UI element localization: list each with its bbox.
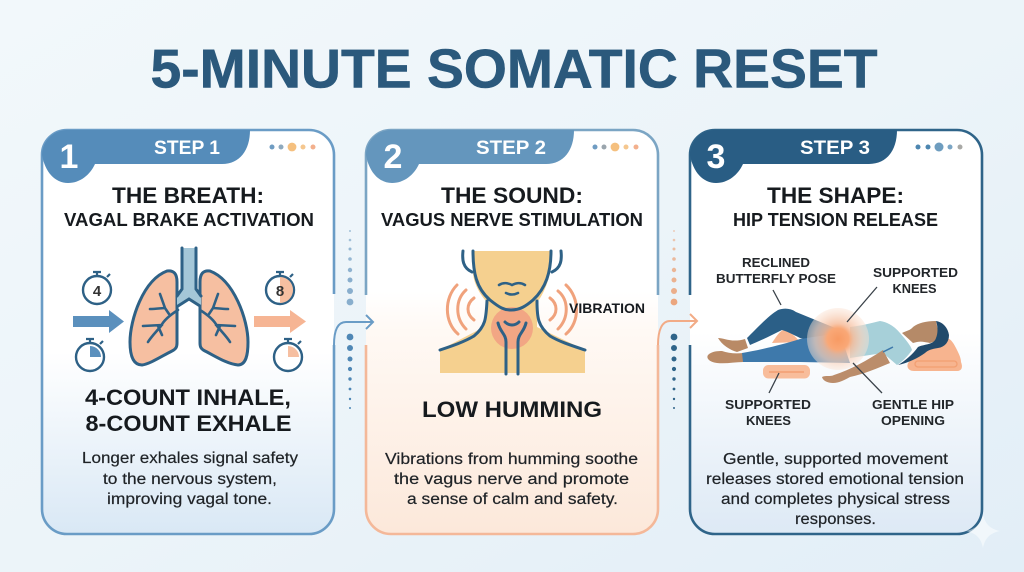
label: reclined butterfly pose: BUTTERFLY POSE	[716, 271, 836, 286]
step 2 heading: VAGUS NERVE STIMULATION	[381, 209, 643, 230]
label: supported knees lower: KNEES	[746, 413, 791, 428]
step 1 subheading: 4-COUNT INHALE,	[85, 385, 291, 410]
step 2 label: STEP 2	[476, 138, 546, 159]
arrow: inhale	[73, 310, 124, 333]
icon: stopwatch 4: 4	[93, 283, 102, 300]
step 2 subheading: LOW HUMMING	[422, 397, 602, 422]
icon: sparkle	[966, 514, 1000, 548]
icon: stopwatch 4	[83, 272, 111, 304]
step 3 description	[706, 451, 964, 528]
icon: lungs	[130, 248, 248, 365]
step 1 heading	[64, 183, 314, 230]
panel: step 3 the shape	[690, 130, 982, 534]
knee towels	[772, 330, 800, 343]
arrow: exhale	[254, 310, 306, 333]
arm	[822, 350, 890, 383]
legs	[747, 309, 840, 348]
icon: stopwatch 8: 8	[276, 283, 284, 300]
connector: step 1 to step 2	[334, 230, 373, 409]
step 2 progress dots	[592, 143, 638, 151]
step 1 description: to the nervous system,	[103, 471, 277, 488]
label: supported knees lower: SUPPORTED	[725, 397, 811, 412]
ear	[926, 336, 930, 342]
label: supported knees upper: SUPPORTED	[873, 265, 958, 280]
label: supported knees lower	[725, 397, 811, 428]
step 3 heading: THE SHAPE:	[767, 183, 904, 208]
step 2 description: the vagus nerve and promote	[394, 471, 629, 488]
step 1 number: 1	[60, 138, 78, 176]
step 1 heading: THE BREATH:	[112, 183, 264, 208]
step 1 description: improving vagal tone.	[107, 491, 272, 508]
panel: step 1 the breath	[42, 130, 334, 534]
step 3 description: responses.	[795, 511, 876, 528]
title: 5-MINUTE SOMATIC RESET	[150, 38, 878, 100]
step 1 description: Longer exhales signal safety	[82, 450, 298, 467]
step 1 heading: VAGAL BRAKE ACTIVATION	[64, 209, 314, 230]
step 2 header tab	[366, 130, 574, 183]
feet	[718, 338, 748, 352]
icon: stopwatch bottom right	[274, 339, 302, 371]
step 3 description: releases stored emotional tension	[706, 471, 964, 488]
label: reclined butterfly pose: RECLINED	[742, 255, 810, 270]
icon: stopwatch bottom left	[76, 339, 104, 371]
step 2 number: 2	[384, 138, 402, 176]
icon: vibration waves right	[550, 285, 576, 334]
label: gentle hip opening	[872, 397, 954, 428]
step 3 heading: HIP TENSION RELEASE	[733, 209, 938, 230]
step 1 subheading	[85, 385, 292, 436]
step 3 description: Gentle, supported movement	[723, 451, 949, 468]
panel: step 2 the sound	[366, 130, 658, 534]
step 2 heading	[381, 183, 643, 230]
vibration label: VIBRATION	[569, 300, 645, 316]
step 3 progress dots	[916, 142, 962, 152]
step 3 description: and completes physical stress	[721, 491, 950, 508]
step 3 label: STEP 3	[800, 138, 870, 159]
label: gentle hip opening: GENTLE HIP	[872, 397, 954, 412]
step 1 label: STEP 1	[154, 138, 220, 159]
head pillow	[907, 338, 962, 371]
icon: vibration waves left	[447, 285, 474, 334]
step 2 description	[385, 451, 638, 508]
hair	[898, 321, 949, 365]
torso	[850, 321, 912, 365]
step 1 progress dots	[270, 143, 316, 151]
hip glow	[807, 308, 869, 370]
sleeve line	[883, 347, 893, 352]
step 3 header tab	[690, 130, 897, 183]
label: gentle hip opening: OPENING	[881, 413, 945, 428]
label lines	[769, 287, 882, 393]
connector: step 2 to step 3	[658, 230, 697, 409]
step 3 number: 3	[707, 138, 725, 176]
icon: stopwatch 8	[266, 272, 294, 304]
step 1 header tab	[42, 130, 250, 183]
step 2 description: a sense of calm and safety.	[407, 491, 618, 508]
icon: neck and throat	[440, 251, 585, 374]
step 3 heading	[733, 183, 938, 230]
illustration: reclined butterfly pose	[707, 308, 962, 383]
step 1 subheading: 8-COUNT EXHALE	[86, 411, 292, 436]
step 2 description: Vibrations from humming soothe	[385, 451, 638, 468]
label: supported knees upper: KNEES	[892, 281, 937, 296]
label: reclined butterfly pose	[716, 255, 836, 286]
label: supported knees upper	[873, 265, 958, 296]
step 2 heading: THE SOUND:	[441, 183, 583, 208]
neck and face	[902, 321, 940, 343]
step 1 description	[82, 450, 298, 508]
